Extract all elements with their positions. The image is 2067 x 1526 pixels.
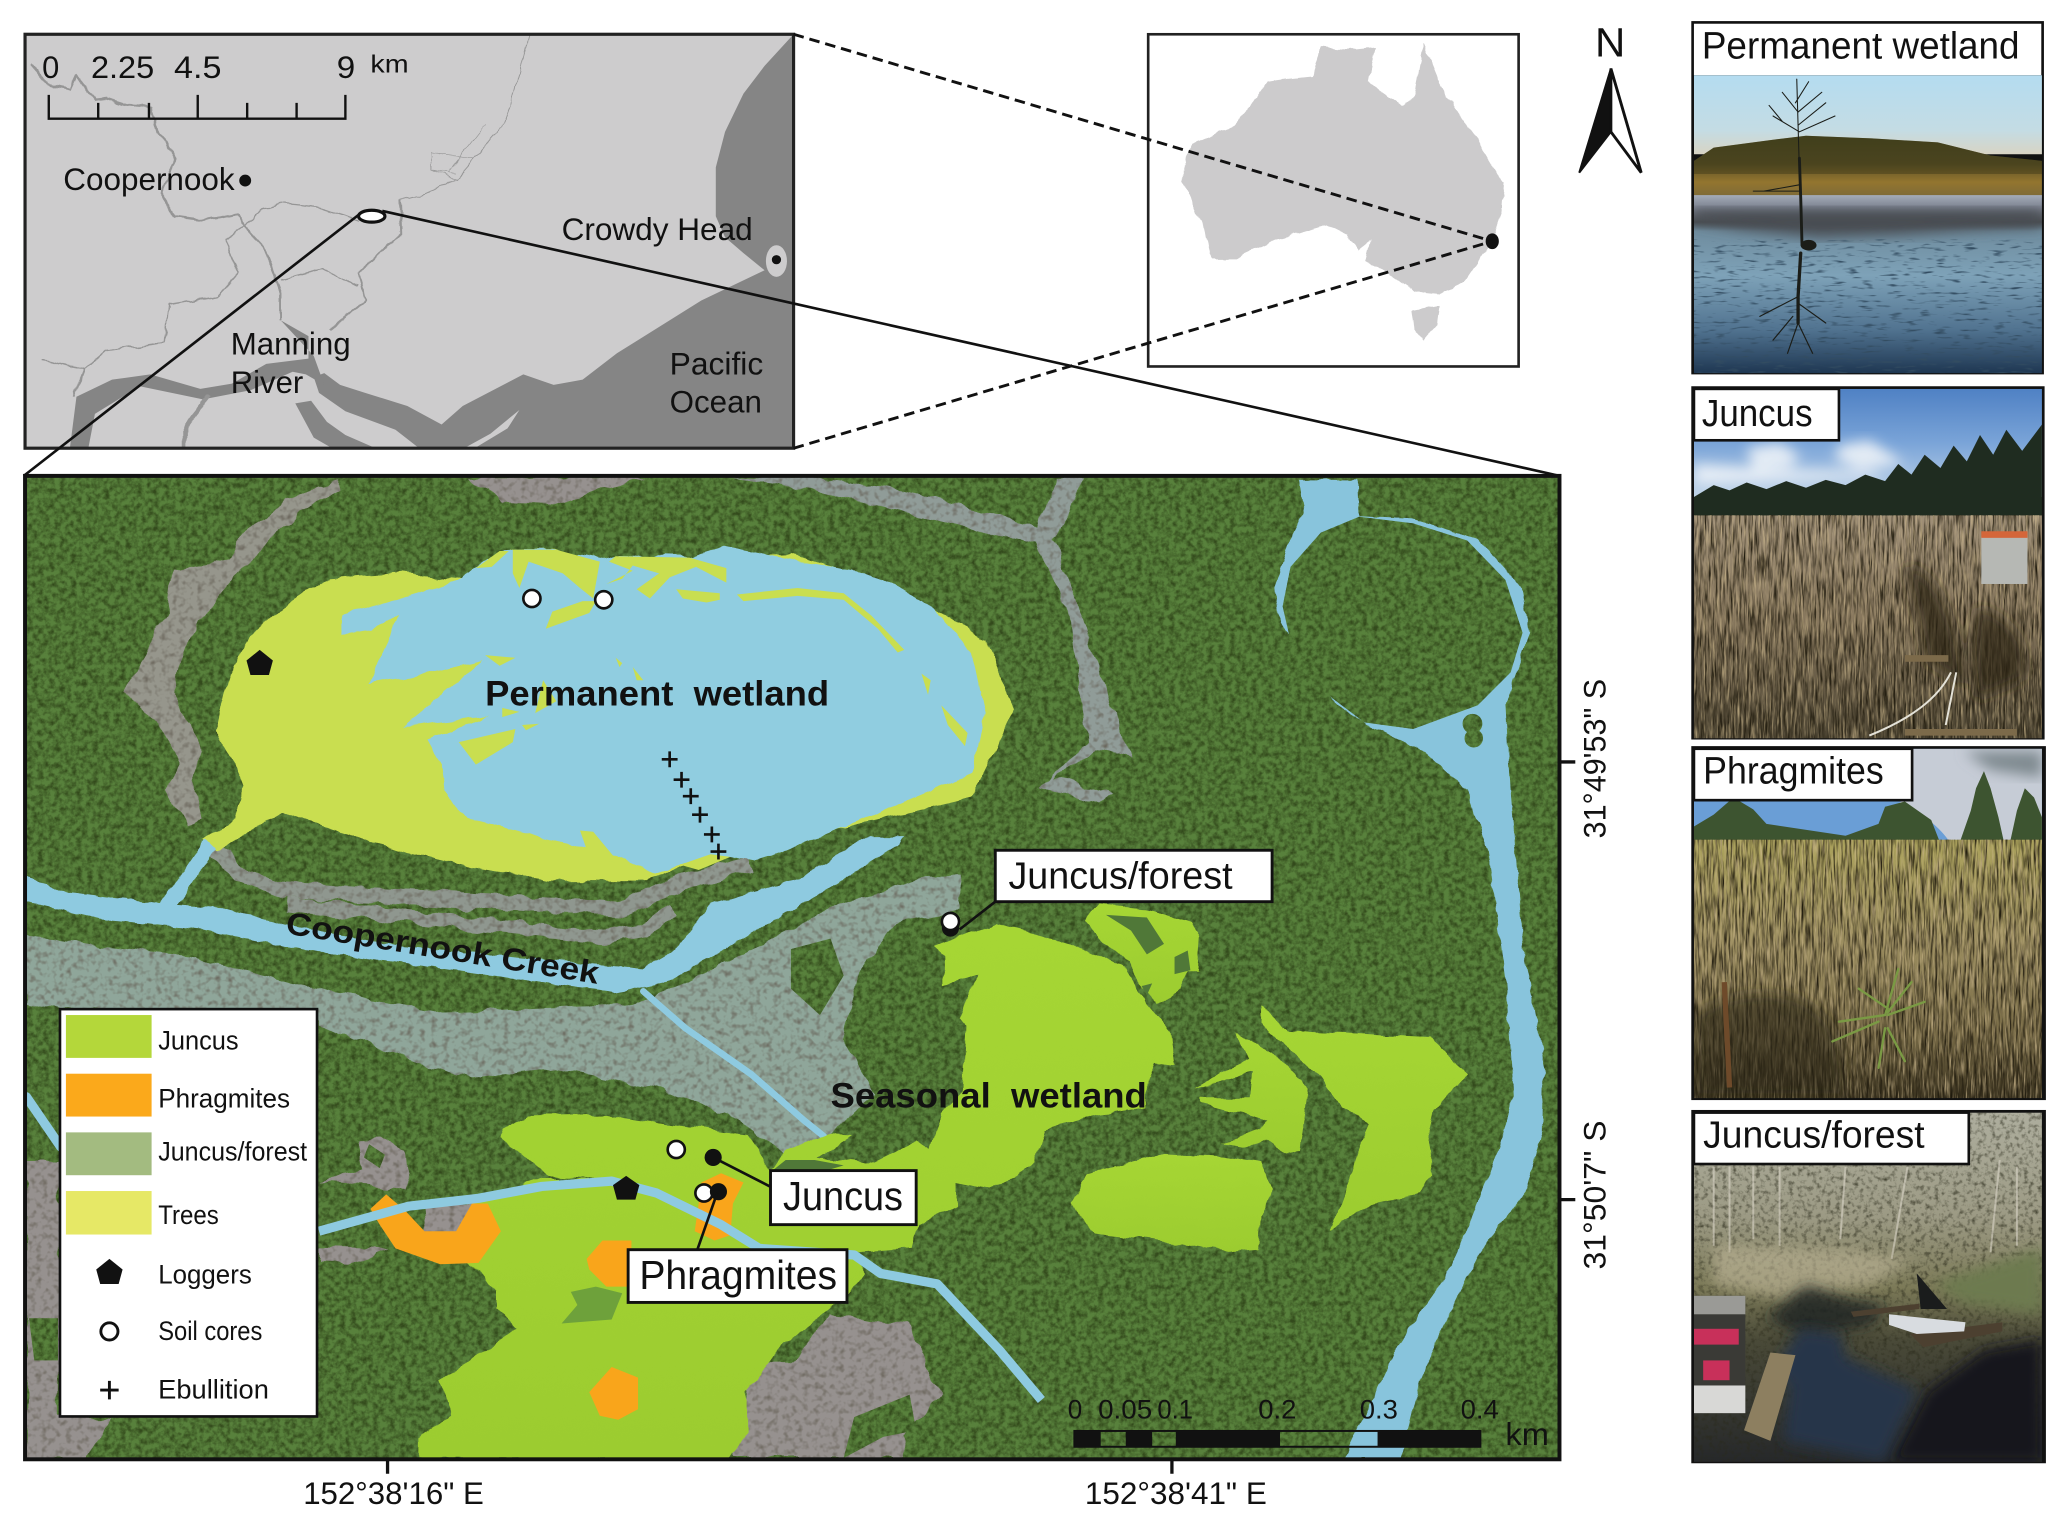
label: Permanent wetland: Permanent wetland <box>485 673 829 713</box>
photo panel: Permanent wetland <box>1691 21 2044 374</box>
scale bar: main map: 0.2 <box>1258 1394 1296 1424</box>
legend: Soil cores: Soil cores <box>158 1316 262 1346</box>
legend: Juncus: Juncus <box>158 1025 239 1055</box>
scale bar: main map: 0.05 <box>1098 1394 1152 1424</box>
legend: Trees: Trees <box>158 1200 219 1230</box>
thin creeks <box>26 991 824 1147</box>
main map: land cover <box>25 476 1559 1459</box>
legend: Loggers <box>96 1259 252 1289</box>
legend: Juncus/forest <box>66 1132 308 1175</box>
latitude ticks and labels: 31°49'53" S <box>1577 679 1613 838</box>
callout: Juncus/forest: Juncus/forest <box>1008 854 1233 897</box>
Australia locator map <box>1148 34 1519 366</box>
legend: Ebullition: Ebullition <box>158 1375 269 1405</box>
Juncus/forest patch <box>562 1287 622 1324</box>
scale bar: main map: km <box>1505 1416 1549 1452</box>
scale bar: inset map: 9 <box>337 49 355 85</box>
Phragmites patches <box>370 1173 743 1420</box>
label: Coopernook Creek: Coopernook Creek <box>284 905 602 991</box>
callout: Phragmites <box>628 1183 847 1302</box>
photo panel: Permanent wetland: Permanent wetland <box>1702 25 2020 68</box>
scale bar: main map <box>1068 1394 1549 1452</box>
dashed lines to Australia locator <box>794 34 1492 448</box>
north arrow: N <box>1595 20 1625 66</box>
photo panel: Juncus/forest <box>1691 1110 2046 1463</box>
photo panel: Juncus <box>1691 386 2045 740</box>
legend: Phragmites <box>66 1074 290 1117</box>
scale bar: inset map: km <box>370 51 409 79</box>
latitude ticks and labels: 31°50'7" S <box>1577 1121 1613 1269</box>
legend: Juncus <box>66 1015 239 1058</box>
Coopernook Creek water <box>26 837 904 993</box>
scale bar: main map: 0.4 <box>1461 1394 1499 1424</box>
legend: Trees <box>66 1191 219 1235</box>
oxbow forest <box>1283 517 1523 747</box>
longitude ticks and labels <box>303 1459 1267 1511</box>
forest islets in clearings <box>29 939 916 1458</box>
legend: Soil cores <box>101 1316 262 1346</box>
callout: Phragmites: Phragmites <box>639 1252 837 1298</box>
ocean and estuary <box>70 34 794 448</box>
right river <box>1275 480 1544 1458</box>
photo panel: Phragmites <box>1691 746 2046 1100</box>
wetland: tree islands <box>459 550 968 870</box>
lower creek <box>319 1181 1041 1400</box>
inset place labels: River <box>231 364 303 400</box>
inset place labels: Crowdy Head <box>562 211 753 247</box>
thin rivers <box>32 34 530 448</box>
longitude ticks and labels: 152°38'41" E <box>1085 1475 1267 1511</box>
main map frame <box>25 476 1559 1459</box>
scale bar: main map: 0.1 <box>1157 1394 1193 1424</box>
seasonal wetland: Juncus <box>418 904 1467 1459</box>
legend <box>60 1009 317 1416</box>
photo panel: Phragmites: Phragmites <box>1703 750 1884 793</box>
latitude ticks and labels <box>1559 679 1613 1269</box>
label: Seasonal wetland: Seasonal wetland <box>830 1075 1147 1115</box>
scale bar: main map: 0 <box>1068 1394 1082 1424</box>
inset place labels: Coopernook <box>63 161 235 197</box>
inset place labels: Ocean <box>670 384 762 420</box>
legend: Juncus/forest: Juncus/forest <box>158 1137 308 1167</box>
clearings and tracks <box>26 477 1131 1458</box>
callout: Juncus/forest <box>942 850 1272 937</box>
scale bar: inset map: 0 <box>42 49 59 85</box>
wetland: water <box>341 546 985 874</box>
callout: Juncus <box>705 1149 916 1225</box>
photo panel: Juncus/forest: Juncus/forest <box>1703 1114 1925 1157</box>
scale bar: inset map <box>42 49 409 119</box>
zoom lines from inset to main map <box>24 210 1559 476</box>
inset place labels: Manning <box>231 326 351 362</box>
longitude ticks and labels: 152°38'16" E <box>303 1475 484 1511</box>
photo panel: Juncus: Juncus <box>1702 392 1813 435</box>
scale bar: inset map: 2.25 <box>91 49 154 85</box>
scale bar: main map: 0.3 <box>1360 1394 1398 1424</box>
legend: Loggers: Loggers <box>158 1259 252 1289</box>
scale bar: inset map: 4.5 <box>174 49 221 85</box>
callout: Juncus: Juncus <box>783 1173 903 1219</box>
wetland: trees <box>204 550 1015 881</box>
markers: soil cores, loggers, ebullition <box>247 590 726 1200</box>
legend: Ebullition <box>100 1375 269 1405</box>
inset place labels: Pacific <box>670 345 763 381</box>
inset place labels <box>63 161 763 420</box>
legend: Phragmites: Phragmites <box>158 1083 290 1113</box>
north arrow <box>1579 20 1641 173</box>
inset map: Manning River region <box>25 34 794 448</box>
